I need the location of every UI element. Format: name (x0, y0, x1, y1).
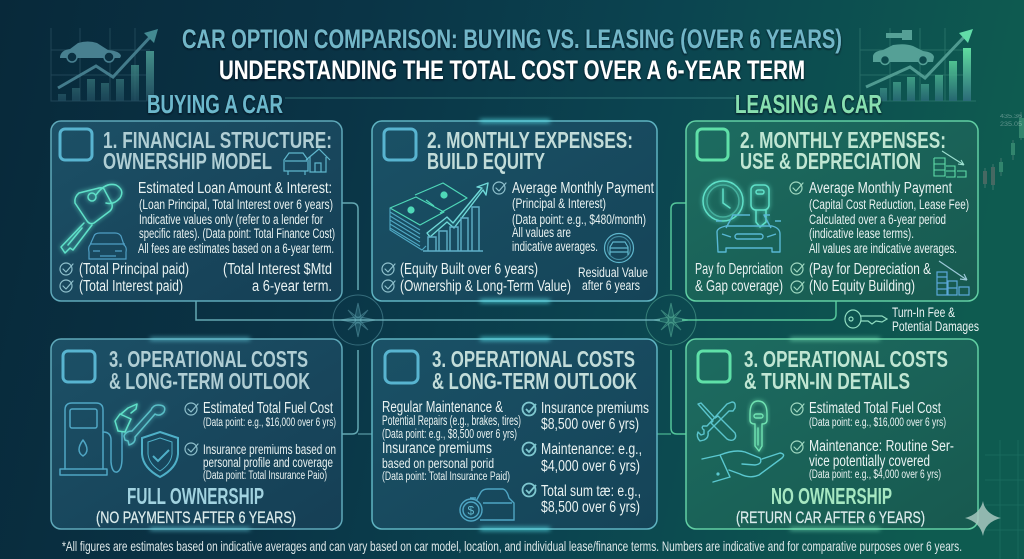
icon: car in circle (604, 234, 634, 262)
maintenance text: Potential Repairs (e.g., brakes, tires) (382, 413, 521, 428)
body text: All fees are estimates based on a 6-year term. (138, 241, 334, 256)
right column figures: Total sum tæ: e.g., (541, 483, 641, 500)
background ticker numbers: 435.36 (1000, 114, 1023, 120)
fuel cost text: Estimated Total Fuel Cost (203, 400, 334, 417)
icon: check (382, 280, 395, 292)
panel heading (109, 346, 310, 394)
icon: car growth chart left (51, 28, 158, 101)
panel heading: USE & DEPRECIATION (740, 148, 921, 174)
fuel cost text: (Data point: e.g., $16,000 over 6 yrs) (809, 417, 946, 429)
panel: operational costs, totals (372, 339, 657, 529)
icon: check (790, 182, 803, 194)
insurance text: (Data point: Total Insurance Paid) (382, 471, 510, 483)
side note: a 6-year term. (252, 278, 332, 295)
fuel cost text: Estimated Total Fuel Cost (809, 400, 942, 417)
panel heading: 1. FINANCIAL STRUCTURE: (103, 127, 332, 153)
background grid bottom right (985, 440, 1024, 559)
icon: check (185, 443, 198, 455)
callout text (892, 305, 979, 334)
checklist text (79, 261, 189, 295)
body text (138, 180, 335, 256)
checklist text: (Equity Built over 6 years) (400, 261, 538, 278)
fuel cost text (203, 400, 336, 429)
body text (809, 180, 969, 256)
side note (223, 261, 332, 295)
subtitle: UNDERSTANDING THE TOTAL COST OVER A 6-YEAR TERM (219, 55, 805, 85)
panel heading (432, 346, 637, 394)
maintenance text: Maintenance: Routine Ser- (809, 438, 954, 455)
body text: Average Monthly Payment (512, 180, 655, 197)
panel heading: OWNERSHIP MODEL (103, 148, 272, 174)
checklist text: (Ownership & Long-Term Value) (400, 278, 571, 295)
right column figures (541, 400, 649, 516)
checklist text: (Total Interest paid) (79, 278, 183, 295)
compass star: right (646, 295, 696, 345)
icon: check (791, 263, 804, 275)
panel: monthly expenses, build equity (372, 121, 657, 301)
icon: empty checkbox (63, 351, 95, 382)
side note: (Total Interest $Mtd (223, 261, 332, 278)
panel: operational costs, full ownership (51, 339, 342, 529)
panel: operational costs, turn-in details (686, 339, 978, 529)
checklist text: (Total Principal paid) (79, 261, 189, 278)
icon: check (493, 182, 506, 194)
residual value note: after 6 years (582, 278, 640, 293)
panel heading: & LONG-TERM OUTLOOK (109, 368, 310, 394)
icon: check (791, 281, 804, 293)
icon: tools, key and hand (697, 401, 784, 482)
body text: Indicative values only (refer to a lender for (139, 212, 323, 227)
panel heading: 3. OPERATIONAL COSTS (109, 346, 308, 372)
icon: empty checkbox (385, 351, 418, 383)
connector lines: leasing side (657, 203, 836, 434)
heading: buying a car: BUYING A CAR (147, 89, 283, 119)
fuel cost text: (Data point: e.g., $16,000 over 6 yrs) (203, 417, 336, 429)
icon: empty checkbox (698, 351, 730, 382)
insurance text (382, 440, 510, 483)
insurance text: Insurance premiums (382, 440, 492, 457)
icon: check (382, 263, 395, 275)
outcome: full ownership: FULL OWNERSHIP (127, 483, 264, 509)
insurance text: based on personal porid (382, 456, 494, 471)
body text: Calculated over a 6-year period (809, 212, 946, 227)
icon: sparkle (965, 501, 1001, 536)
callout text: Turn-In Fee & (892, 305, 955, 320)
depreciation note: & Gap coverage) (695, 278, 783, 295)
icon: car key (61, 184, 126, 259)
outcome: no ownership: NO OWNERSHIP (771, 483, 892, 509)
panel heading: BUILD EQUITY (427, 148, 545, 174)
body text: specific rates). (Data point: Total Finance Cost) (139, 226, 335, 241)
body text: (indicative lease terms). (809, 226, 914, 241)
icon: car and house (284, 149, 330, 175)
panel: monthly expenses, use and depreciation (686, 121, 978, 301)
body text: Average Monthly Payment (809, 180, 953, 197)
body text: (Loan Principal, Total Interest over 6 years) (139, 197, 333, 212)
background candlestick chart (983, 112, 1024, 190)
insurance text: Insurance premiums based on (203, 442, 336, 457)
icon: car with dollar coin: $ (468, 504, 474, 518)
icon: check (522, 402, 536, 416)
icon: falling coins (934, 151, 966, 177)
icon: empty checkbox (384, 129, 416, 160)
background ticker numbers (1000, 114, 1023, 128)
heading: leasing a car: LEASING A CAR (735, 89, 882, 119)
icon: check (522, 442, 536, 456)
icon: check (791, 441, 804, 453)
icon: falling coins blue (937, 261, 969, 295)
checklist text: (No Equity Building) (809, 278, 915, 295)
panel heading (103, 127, 332, 174)
body text: All values are indicative averages. (809, 241, 957, 256)
body text: (Principal & Interest) (512, 196, 606, 211)
callout text: Potential Damages (892, 319, 979, 334)
icon: key (845, 310, 887, 328)
icon: car with dollar coin (460, 489, 514, 521)
checklist text (400, 261, 571, 295)
maintenance text: (Data point: e.g., $8,500 over 6 yrs) (382, 427, 517, 441)
icon: check (60, 263, 73, 275)
body text: Estimated Loan Amount & Interest: (138, 180, 332, 197)
icon: fuel pump, wrench and shield (60, 403, 178, 477)
icon: money and rising chart (390, 183, 488, 251)
icon: clock, key and car (703, 181, 781, 252)
right column figures: $4,000 over 6 yrs) (541, 458, 640, 475)
right column figures: Maintenance: e.g., (541, 441, 642, 458)
connector lines: buying side (196, 203, 660, 434)
maintenance text (382, 399, 521, 441)
panel heading (427, 127, 633, 174)
icon: empty checkbox (697, 129, 728, 160)
outcome: full ownership: (NO PAYMENTS AFTER 6 YEARS) (96, 508, 296, 527)
insurance text: personal profile and coverage (203, 455, 333, 470)
panel heading: & LONG-TERM OUTLOOK (432, 368, 637, 394)
icon: check (60, 280, 73, 292)
body text (512, 180, 655, 254)
maintenance text: vice potentially covered (809, 453, 930, 470)
callout: turn-in fee (845, 305, 979, 334)
title rule (285, 97, 740, 99)
compass star: left (333, 295, 383, 345)
body text: indicative averages. (512, 239, 598, 254)
icon: check (522, 484, 536, 496)
residual value note: Residual Value (578, 265, 648, 280)
right column figures: $8,500 over 6 yrs) (541, 416, 639, 433)
insurance text: (Data point: Total Insurance Paio) (203, 470, 327, 482)
right column figures: Insurance premiums (541, 400, 649, 417)
residual value note (578, 265, 648, 293)
checklist text (809, 261, 931, 295)
body text: All values are (512, 225, 571, 240)
outcome: no ownership: (RETURN CAR AFTER 6 YEARS) (736, 508, 925, 527)
panel heading: 3. OPERATIONAL COSTS (432, 346, 635, 372)
icon: car growth chart right (860, 28, 976, 101)
background ticker numbers: 235.05 (1000, 122, 1023, 128)
panel heading: 3. OPERATIONAL COSTS (744, 346, 948, 372)
checklist text: (Pay for Depreciation & (809, 261, 931, 278)
panel heading: & TURN-IN DETAILS (744, 368, 910, 394)
depreciation note (695, 261, 783, 295)
outcome: no ownership (736, 483, 925, 527)
body text: (Data point: e.g., $480/month) (512, 212, 646, 227)
panel heading (744, 346, 948, 394)
icon: check (185, 403, 198, 415)
right column figures: $8,500 over 6 yrs) (541, 499, 640, 516)
maintenance text: Regular Maintenance & (382, 399, 503, 416)
panel heading (740, 127, 946, 174)
maintenance text (809, 438, 954, 481)
icon: empty checkbox (60, 129, 92, 160)
fuel cost text (809, 400, 946, 429)
body text: (Capital Cost Reduction, Lease Fee) (809, 197, 969, 212)
maintenance text: (Data point: e.g., $4,000 over 6 yrs) (809, 469, 941, 481)
depreciation note: Pay fo Deprciation (695, 261, 783, 278)
panel heading: 2. MONTHLY EXPENSES: (740, 127, 946, 153)
outcome: full ownership (96, 483, 296, 527)
icon: check (791, 403, 804, 415)
panel: financial structure (51, 121, 342, 301)
panel heading: 2. MONTHLY EXPENSES: (427, 127, 633, 153)
insurance text (203, 442, 336, 482)
